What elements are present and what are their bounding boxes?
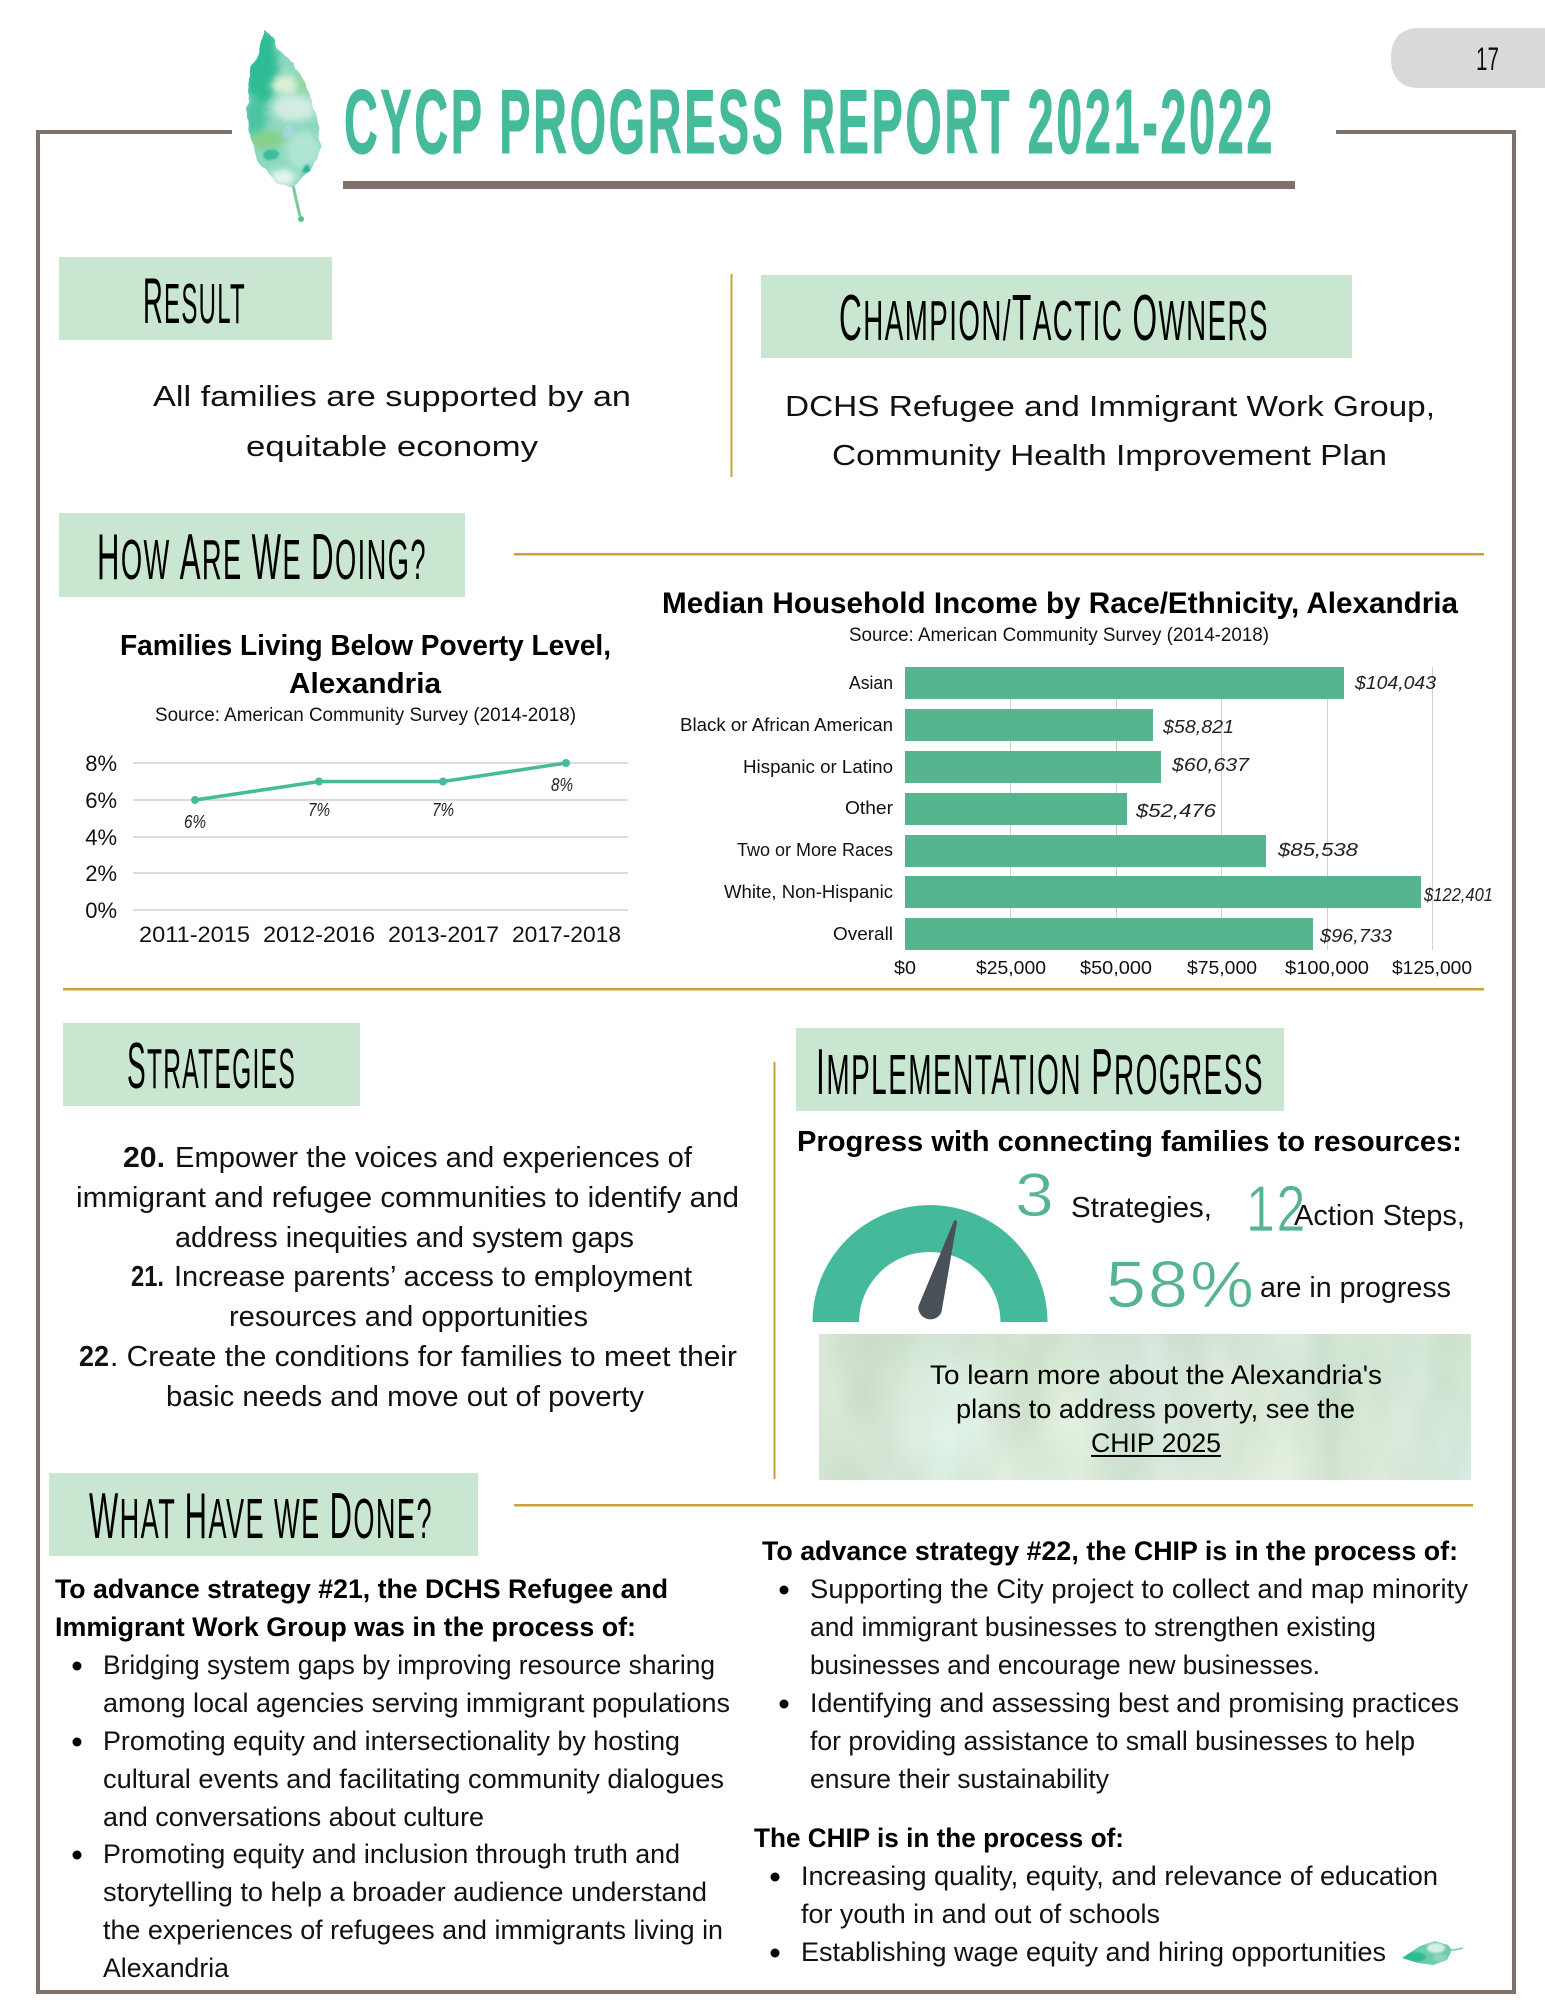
page number tab: 17 [1476,41,1499,77]
y axis labels: 8% [85,751,117,776]
icon: small leaf [1402,1941,1463,1965]
stat: action steps [1246,1172,1465,1245]
subheading: progress: Progress with connecting families to resources: [797,1126,1462,1158]
text: owners: DCHS Refugee and Immigrant Work Group, [785,391,1435,423]
stat: action steps: 12 [1246,1172,1307,1245]
category labels: White, Non-Hispanic [724,882,893,902]
value labels: $122,401 [1423,885,1493,905]
panel: income bar chart [662,587,1493,978]
chart title: families below poverty: Families Living Below Poverty Level, [120,630,611,662]
chart title: families below poverty [120,630,611,700]
bullet list: strategy 21: the experiences of refugees and immigrants living in [103,1915,723,1945]
bullet list: strategy 22: Supporting the City project to collect and map minority [810,1574,1468,1604]
data labels: 6% [184,812,206,832]
text: owners [785,391,1435,472]
category labels: Other [845,798,893,818]
panel: result [59,257,631,463]
strategy list: immigrant and refugee communities to identify and [76,1182,739,1214]
bullet list: strategy 21: and conversations about culture [103,1802,484,1832]
y axis labels: 4% [85,825,117,850]
heading: champion tactic owners: CHAMPION/TACTIC OWNERS [839,281,1269,354]
source note: Source: American Community Survey (2014-2018) [849,624,1269,646]
x axis labels: 2011-2015 [139,922,250,947]
panel: strategies [63,1023,739,1413]
x axis labels: 2012-2016 [263,922,375,947]
data labels [184,775,573,832]
callout: learn more: plans to address poverty, see the [956,1394,1355,1424]
chart title: families below poverty: Alexandria [289,668,442,700]
strategy list [76,1142,739,1413]
value labels: $52,476 [1135,801,1217,821]
heading: how are we doing [59,513,465,597]
subheading: strategy 21 [55,1574,668,1642]
value labels: $85,538 [1277,840,1358,860]
category labels: Asian [849,673,893,693]
page number tab [1391,28,1545,88]
x axis values: $100,000 [1285,958,1369,978]
data labels: 7% [432,800,454,820]
stat: percent in progress [1106,1247,1451,1321]
bullet list: strategy 21 [72,1650,730,1983]
y axis labels: 0% [85,898,117,923]
bullet list: strategy 21: Promoting equity and intersectionality by hosting [103,1726,680,1756]
category labels: Overall [833,924,893,944]
y axis labels [85,751,117,923]
bars [905,667,1421,950]
panel: implementation progress [796,1028,1471,1480]
text: owners: Community Health Improvement Plan [832,440,1387,472]
callout: learn more: CHIP 2025 [1091,1428,1221,1458]
stat: strategies: 3 [1015,1161,1056,1229]
panel: strategy 21 actions [55,1574,730,1983]
bullet list: strategy 22 [780,1574,1468,1794]
strategy list: 22 [79,1341,109,1373]
strategy list: Empower the voices and experiences of [175,1142,693,1174]
bullet list: strategy 22: and immigrant businesses to strengthen existing [810,1612,1376,1642]
icon: watercolor leaf [246,30,322,222]
x axis labels: 2013-2017 [388,922,499,947]
x axis labels: 2017-2018 [512,922,621,947]
data labels: 7% [308,800,330,820]
y axis labels: 6% [85,788,117,813]
bullet list: strategy 22: businesses and encourage new businesses. [810,1650,1320,1680]
bullet list: strategy 21: storytelling to help a broader audience understand [103,1877,707,1907]
category labels: Hispanic or Latino [743,757,893,777]
value labels: $104,043 [1354,673,1436,693]
value labels: $58,821 [1162,717,1234,737]
stat: strategies: Strategies, [1071,1192,1212,1224]
data labels: 8% [551,775,573,795]
x axis values: $0 [894,958,916,978]
bullet list: strategy 22: for providing assistance to small businesses to help [810,1726,1415,1756]
category labels: Two or More Races [737,840,893,860]
bullet list: chip: for youth in and out of schools [801,1899,1160,1929]
panel: strategies: STRATEGIES [127,1029,296,1102]
subheading: strategy 22: To advance strategy #22, the CHIP is in the process of: [762,1536,1458,1566]
bullet list: strategy 21: cultural events and facilitating community dialogues [103,1764,724,1794]
x axis values: $125,000 [1392,958,1472,978]
x axis values [894,958,1472,978]
strategy list: address inequities and system gaps [175,1222,634,1254]
bullet list: chip: Increasing quality, equity, and relevance of education [801,1861,1438,1891]
x axis labels [139,922,621,947]
category labels: Black or African American [680,715,893,735]
strategy list: Increase parents’ access to employment [174,1261,692,1293]
title underline [343,181,1295,189]
strategy list: . Create the conditions for families to meet their [110,1341,737,1373]
stat: percent in progress: are in progress [1260,1272,1451,1304]
text: result statement: All families are supported by an [153,381,631,413]
panel: strategy 22 actions [762,1536,1468,1794]
x axis values: $50,000 [1080,958,1152,978]
subheading: strategy 21: To advance strategy #21, the DCHS Refugee and [55,1574,668,1604]
panel: poverty line chart [85,630,628,947]
source note: Source: American Community Survey (2014-2018) [155,704,576,726]
icon: gauge [812,1205,1048,1322]
y axis labels: 2% [85,861,117,886]
callout: learn more [819,1334,1471,1480]
panel: chip actions [754,1823,1438,1967]
stat: percent in progress: 58% [1106,1247,1256,1321]
panel: champion tactic owners [761,275,1435,472]
strategy list: basic needs and move out of poverty [166,1381,644,1413]
value labels: $96,733 [1319,926,1392,946]
text: result statement [153,381,631,463]
heading: what have we done: WHAT HAVE WE DONE? [89,1479,433,1552]
text: result statement: equitable economy [246,431,539,463]
bullet list: strategy 22: Identifying and assessing best and promising practices [810,1688,1459,1718]
value labels [1135,673,1493,946]
bullet list: strategy 21: Bridging system gaps by improving resource sharing [103,1650,715,1680]
subheading: strategy 21: Immigrant Work Group was in the process of: [55,1612,636,1642]
heading: implementation progress: IMPLEMENTATION PROGRESS [816,1035,1264,1108]
strategy list: 20. [123,1142,165,1174]
chart title: median household income: Median Household Income by Race/Ethnicity, Alexandria [662,587,1458,620]
bullet list: strategy 22: ensure their sustainability [810,1764,1109,1794]
stat: strategies [1015,1161,1212,1229]
stat: action steps: Action Steps, [1294,1200,1465,1232]
strategy list: 21. [131,1261,164,1293]
bullet list: chip [770,1861,1438,1967]
x axis values: $25,000 [976,958,1046,978]
callout: learn more: To learn more about the Alexandria's [930,1360,1382,1390]
bullet list: chip: Establishing wage equity and hiring opportunities [801,1937,1386,1967]
bullet list: strategy 21: Promoting equity and inclusion through truth and [103,1839,680,1869]
category labels [680,673,893,944]
subheading: chip: The CHIP is in the process of: [754,1823,1124,1853]
bullet list: strategy 21: among local agencies serving immigrant populations [103,1688,730,1718]
data line [191,759,570,804]
heading: how are we doing: HOW ARE WE DOING? [97,520,427,593]
value labels: $60,637 [1171,755,1250,775]
panel: result: RESULT [143,264,246,337]
strategy list: resources and opportunities [229,1301,588,1333]
bullet list: strategy 21: Alexandria [103,1953,230,1983]
x axis values: $75,000 [1187,958,1257,978]
